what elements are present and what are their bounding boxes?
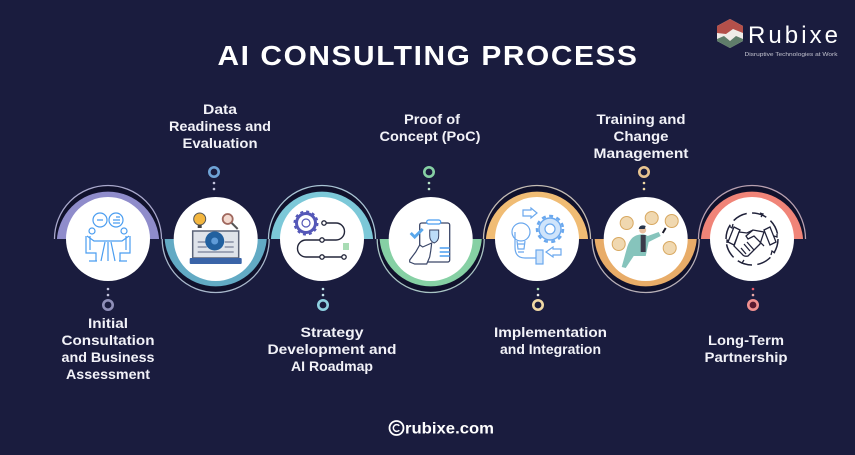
connector and pin bbox=[103, 288, 113, 310]
arc band: light blue bbox=[268, 186, 376, 294]
icon: laptop with bulb and magnifier bbox=[190, 213, 242, 264]
icon: clipboard with shield and hand bbox=[410, 220, 450, 264]
connector and pin bbox=[318, 288, 328, 310]
step 1: initial consultation bbox=[54, 186, 162, 382]
label: Long-Term bbox=[708, 333, 784, 348]
step 5: implementation bbox=[484, 186, 607, 357]
label: Implementation bbox=[494, 325, 607, 340]
label: Management bbox=[594, 146, 689, 161]
label bbox=[594, 112, 689, 161]
label: Assessment bbox=[66, 367, 151, 382]
connector and pin bbox=[209, 167, 219, 190]
label: Development and bbox=[268, 342, 396, 357]
label: Consultation bbox=[62, 333, 154, 348]
step 4: proof of concept bbox=[377, 112, 484, 292]
arc band: coral bbox=[698, 186, 806, 294]
step 7: partnership bbox=[698, 186, 806, 365]
icon: person with skill badges bbox=[612, 212, 678, 268]
label: Training and bbox=[596, 112, 686, 127]
logo: Rubixe: Disruptive Technologies at Work bbox=[744, 52, 838, 58]
label bbox=[169, 102, 271, 151]
arc band: green bbox=[377, 184, 484, 292]
label: Partnership bbox=[704, 350, 788, 365]
label bbox=[494, 325, 607, 357]
label bbox=[268, 325, 396, 374]
arc band: amber bbox=[592, 184, 699, 292]
icon: handshake with circular arrows bbox=[726, 213, 778, 265]
label bbox=[380, 112, 480, 144]
label bbox=[62, 316, 154, 382]
step 6: training bbox=[592, 112, 699, 292]
connector and pin bbox=[639, 167, 649, 190]
label: and Business bbox=[62, 350, 154, 365]
arc band: blue bbox=[162, 184, 269, 292]
title: AI CONSULTING PROCESS bbox=[218, 40, 638, 71]
label: AI Roadmap bbox=[291, 359, 373, 374]
arc band: purple bbox=[54, 186, 162, 294]
label: Evaluation bbox=[182, 136, 258, 151]
connector and pin bbox=[748, 288, 758, 310]
connector and pin bbox=[533, 288, 543, 310]
step 2: data readiness bbox=[162, 102, 271, 292]
icon: bulb, gear and arrows bbox=[512, 208, 563, 264]
footer: website: rubixe.com bbox=[405, 420, 494, 438]
logo: Rubixe bbox=[717, 19, 838, 58]
label: Readiness and bbox=[169, 119, 271, 134]
label: and Integration bbox=[500, 342, 601, 357]
label: Change bbox=[614, 129, 669, 144]
icon: meeting bbox=[86, 213, 130, 261]
step 3: strategy bbox=[268, 186, 396, 374]
label: Strategy bbox=[300, 325, 364, 340]
logo: Rubixe: Rubixe bbox=[748, 22, 838, 49]
label bbox=[704, 333, 788, 365]
connector and pin bbox=[424, 167, 434, 190]
label: Initial bbox=[88, 316, 128, 331]
label: Concept (PoC) bbox=[380, 129, 480, 144]
label: Data bbox=[203, 102, 238, 117]
arc band: orange bbox=[484, 186, 590, 294]
icon: gear and roadmap path bbox=[294, 212, 349, 259]
label: Proof of bbox=[404, 112, 461, 127]
